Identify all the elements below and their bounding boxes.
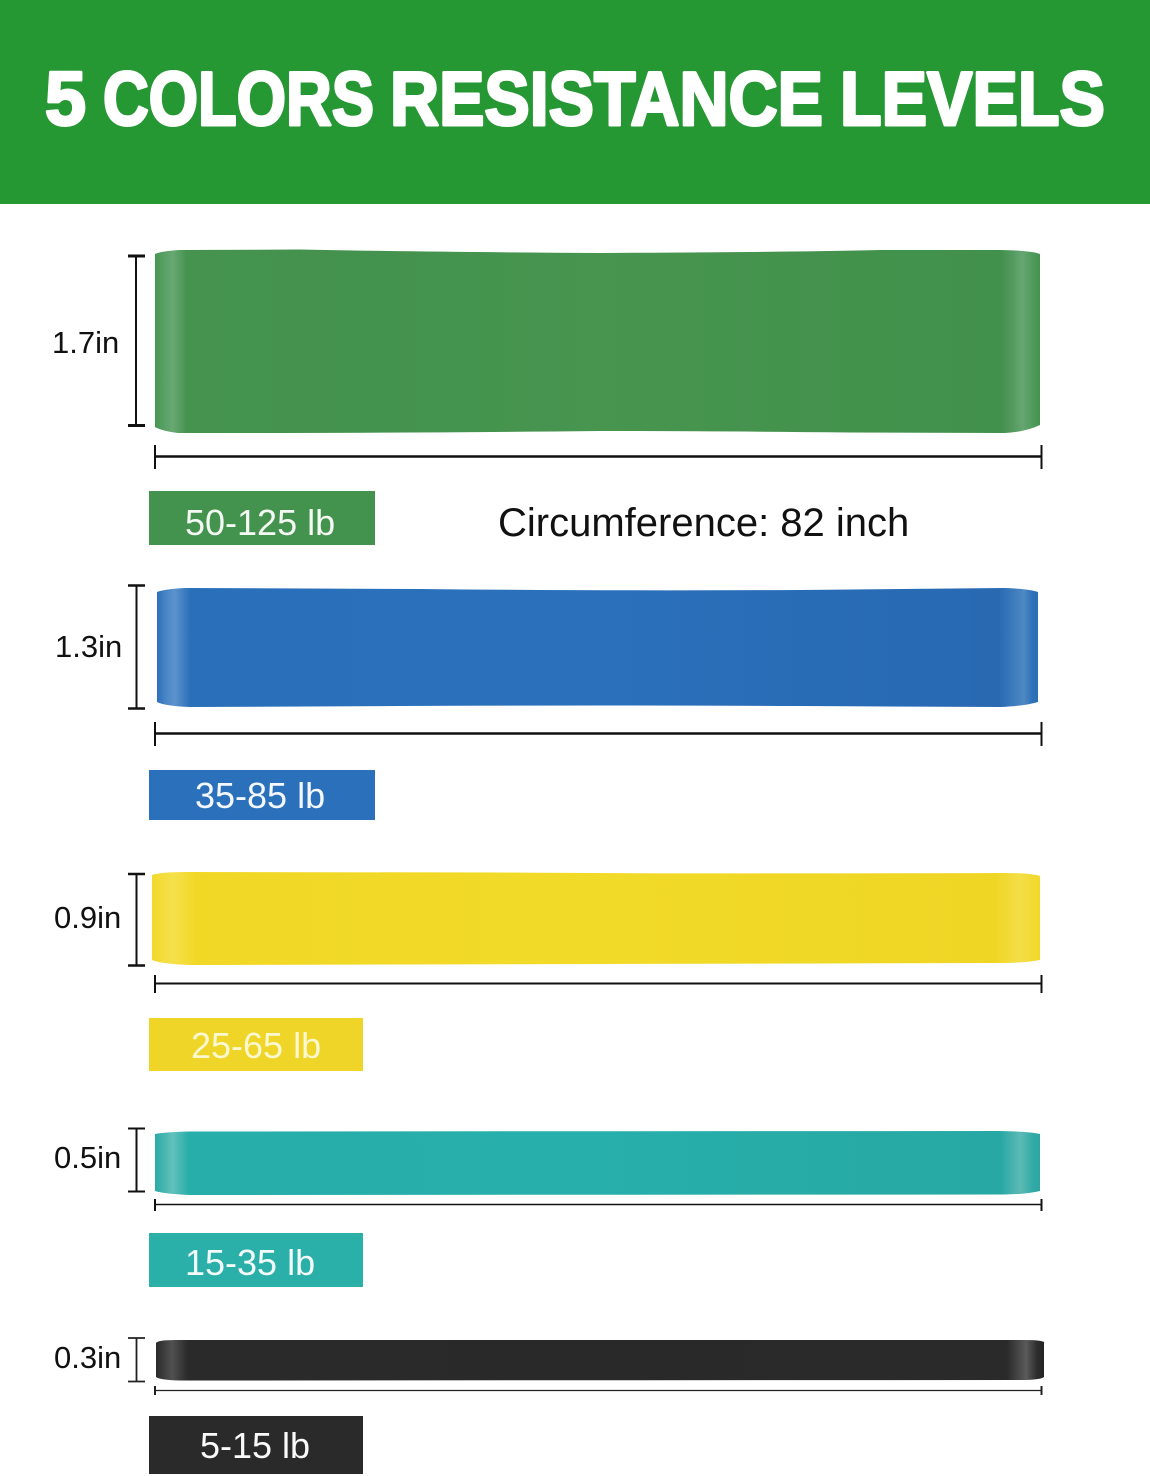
width bracket: 0.5in: [128, 1128, 145, 1192]
resistance tag: 5-15 lb: 5-15 lb: [200, 1425, 310, 1466]
circumference dimension line: [155, 1386, 1042, 1395]
title: RESISTANCE: [390, 57, 823, 142]
circumference note: Circumference: 82 inch: [498, 501, 909, 545]
title: COLORS: [103, 57, 374, 142]
green band group: 1.7in, 50-125 lb: [52, 250, 1042, 545]
teal band group: 0.5in, 15-35 lb: [54, 1128, 1042, 1287]
resistance tag: 15-35 lb: 15-35 lb: [185, 1242, 315, 1283]
black band group: 0.3in, 5-15 lb: [54, 1338, 1044, 1474]
title banner: [0, 0, 1150, 204]
yellow band group: 0.9in, 25-65 lb: [54, 872, 1042, 1071]
blue band: [157, 588, 1038, 707]
resistance tag: 35-85 lb: 35-85 lb: [195, 775, 325, 816]
resistance tag: 25-65 lb: 25-65 lb: [191, 1025, 321, 1066]
width label: 0.5in: 0.5in: [54, 1140, 121, 1175]
blue band group: 1.3in, 35-85 lb: [55, 585, 1042, 820]
title: [45, 57, 1105, 142]
resistance tag: 15-35 lb: [149, 1233, 363, 1287]
title: LEVELS: [840, 57, 1105, 142]
title: 5: [45, 57, 86, 142]
width label: 1.3in: 1.3in: [55, 629, 122, 664]
circumference dimension line: [155, 1199, 1042, 1211]
width bracket: 0.9in: [128, 874, 145, 966]
resistance tag: 50-125 lb: [149, 491, 375, 545]
resistance tag: 25-65 lb: [149, 1018, 363, 1071]
teal band: [155, 1131, 1040, 1195]
width bracket: 1.7in: [128, 256, 145, 426]
width label: 1.7in: 1.7in: [52, 325, 119, 360]
green band: [155, 250, 1040, 433]
width label: 0.3in: 0.3in: [54, 1340, 121, 1375]
width bracket: 1.3in: [128, 585, 145, 709]
circumference dimension line: [155, 975, 1042, 993]
resistance tag: 50-125 lb: 50-125 lb: [185, 502, 335, 543]
circumference dimension line: [155, 445, 1042, 469]
resistance tag: 35-85 lb: [149, 770, 375, 820]
yellow band: [152, 872, 1040, 965]
circumference dimension line: [155, 722, 1042, 746]
width label: 0.9in: 0.9in: [54, 900, 121, 935]
black band: [156, 1340, 1044, 1380]
resistance tag: 5-15 lb: [149, 1416, 363, 1474]
width bracket: 0.3in: [128, 1338, 145, 1382]
